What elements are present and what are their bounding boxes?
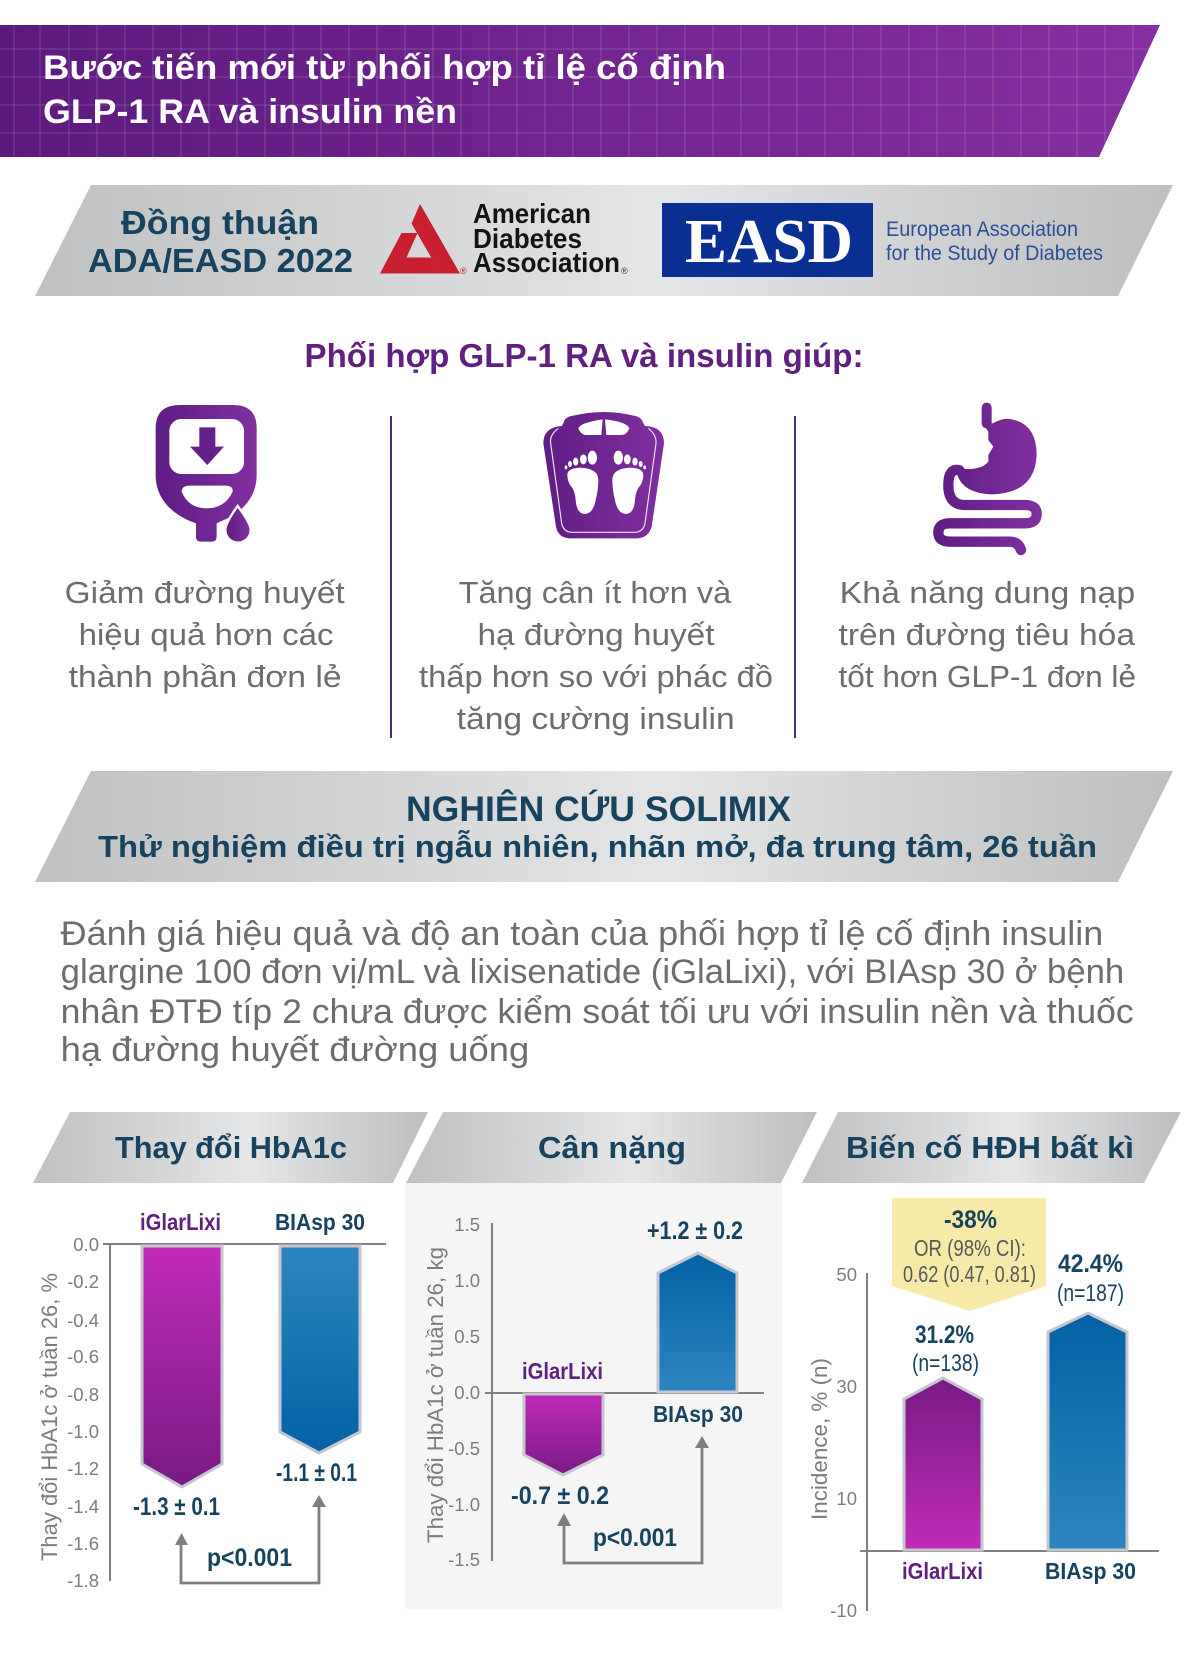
panel: weight background bbox=[405, 1183, 782, 1609]
text block: study objective: Đánh giá hiệu quả và độ an toàn của phối hợp tỉ lệ cố định insulin bbox=[61, 915, 1103, 953]
title: GLP-1 RA và insulin nền bbox=[43, 93, 457, 131]
panel: weight chart bbox=[406, 1112, 817, 1570]
axes and ticks bbox=[807, 1264, 1159, 1621]
panel: SOLIMIX banner bbox=[35, 771, 1173, 882]
bar: iGlarLixi: -1.3 ± 0.1 bbox=[133, 1493, 220, 1521]
axes and ticks: -1.0 bbox=[448, 1494, 480, 1515]
heading: consensus: ADA/EASD 2022 bbox=[88, 242, 353, 279]
text: benefit 2: thấp hơn so với phác đồ bbox=[419, 659, 773, 694]
heading: combination benefits: Phối hợp GLP-1 RA và insulin giúp: bbox=[304, 337, 864, 374]
axes and ticks: -1.2 bbox=[67, 1458, 99, 1479]
text: benefit 2: hạ đường huyết bbox=[478, 617, 715, 652]
arrow: significance bbox=[557, 1436, 709, 1563]
heading: weight bbox=[406, 1112, 817, 1183]
header banner bbox=[0, 25, 1200, 157]
axes and ticks bbox=[423, 1214, 764, 1570]
title bbox=[43, 49, 726, 131]
bar: BIAsp 30 bbox=[647, 1217, 743, 1427]
text: benefit 1: hiệu quả hơn các bbox=[79, 617, 334, 652]
logo: American Diabetes Association: ® bbox=[460, 266, 467, 276]
axes and ticks: -0.6 bbox=[67, 1346, 99, 1367]
callout: odds ratio: -38% bbox=[944, 1206, 997, 1234]
panel: benefit 2 bbox=[419, 412, 773, 736]
bar: BIAsp 30: +1.2 ± 0.2 bbox=[647, 1217, 743, 1245]
text: benefit 2 bbox=[419, 575, 773, 736]
logo: American Diabetes Association: Diabetes bbox=[473, 223, 582, 254]
bar: BIAsp 30: -1.1 ± 0.1 bbox=[276, 1459, 357, 1487]
heading: HbA1c: Thay đổi HbA1c bbox=[115, 1130, 347, 1165]
axes and ticks: 0.0 bbox=[73, 1234, 99, 1255]
heading: HbA1c bbox=[33, 1112, 428, 1183]
bar: BIAsp 30: BIAsp 30 bbox=[1045, 1558, 1136, 1584]
axes and ticks: -0.4 bbox=[67, 1310, 99, 1331]
axes and ticks: 30 bbox=[836, 1376, 857, 1397]
logo: EASD bbox=[662, 203, 1103, 277]
axes and ticks: 0.0 bbox=[454, 1382, 480, 1403]
axes and ticks: 1.0 bbox=[454, 1270, 480, 1291]
axes and ticks: 1.5 bbox=[454, 1214, 480, 1235]
logo: EASD: for the Study of Diabetes bbox=[886, 242, 1103, 265]
bar: iGlarLixi: iGlarLixi bbox=[902, 1558, 983, 1584]
bar: BIAsp 30 bbox=[1045, 1250, 1136, 1584]
axes and ticks bbox=[37, 1234, 386, 1591]
icon: weighing scale bbox=[543, 412, 664, 538]
arrow: significance: p<0.001 bbox=[207, 1544, 292, 1572]
axes and ticks: 10 bbox=[836, 1488, 857, 1509]
axes and ticks: -1.0 bbox=[67, 1421, 99, 1442]
icon: stomach and intestine bbox=[938, 408, 1037, 550]
text: benefit 3: tốt hơn GLP-1 đơn lẻ bbox=[838, 659, 1136, 694]
bar: iGlarLixi bbox=[133, 1209, 222, 1521]
callout: odds ratio: 0.62 (0.47, 0.81) bbox=[903, 1261, 1036, 1287]
bar: iGlarLixi: iGlarLixi bbox=[522, 1358, 603, 1384]
heading: consensus: Đồng thuận bbox=[121, 204, 319, 241]
arrow: significance bbox=[175, 1495, 326, 1583]
bar: iGlarLixi: -0.7 ± 0.2 bbox=[511, 1482, 609, 1510]
bar: BIAsp 30: (n=187) bbox=[1057, 1280, 1124, 1307]
logo: American Diabetes Association: ® bbox=[621, 266, 628, 276]
bar: iGlarLixi bbox=[902, 1321, 983, 1584]
bar: iGlarLixi: (n=138) bbox=[912, 1350, 979, 1377]
heading: SOLIMIX: NGHIÊN CỨU SOLIMIX bbox=[406, 789, 792, 829]
axes and ticks: -0.8 bbox=[67, 1384, 99, 1405]
icon: glucose meter bbox=[156, 405, 257, 543]
text: benefit 2: Tăng cân ít hơn và bbox=[459, 575, 732, 610]
bar: iGlarLixi: 31.2% bbox=[915, 1321, 974, 1349]
axes and ticks: -1.8 bbox=[67, 1570, 99, 1591]
text block: study objective bbox=[61, 915, 1134, 1069]
logo: EASD: European Association bbox=[886, 218, 1078, 241]
text: benefit 2: tăng cường insulin bbox=[457, 701, 735, 736]
bar: iGlarLixi: iGlarLixi bbox=[140, 1209, 221, 1235]
callout: odds ratio bbox=[892, 1198, 1046, 1311]
axes and ticks: -10 bbox=[830, 1600, 857, 1621]
text: benefit 1 bbox=[65, 575, 345, 694]
bar: iGlarLixi bbox=[511, 1358, 609, 1510]
text block: study objective: nhân ĐTĐ típ 2 chưa được kiểm soát tối ưu với insulin nền và thuốc bbox=[61, 993, 1134, 1031]
bar: BIAsp 30: BIAsp 30 bbox=[275, 1209, 365, 1235]
bar: BIAsp 30: BIAsp 30 bbox=[653, 1401, 743, 1427]
text: benefit 3: trên đường tiêu hóa bbox=[838, 617, 1136, 652]
axes and ticks: -0.2 bbox=[67, 1271, 99, 1292]
heading: hypoglycaemia bbox=[802, 1112, 1181, 1183]
axes and ticks: 50 bbox=[836, 1264, 857, 1285]
logo: EASD: EASD bbox=[685, 208, 853, 276]
axes and ticks: Thay đổi HbA1c ở tuần 26, % bbox=[37, 1273, 62, 1561]
axes and ticks: -1.5 bbox=[448, 1549, 480, 1570]
panel: benefit 3 bbox=[838, 408, 1136, 694]
text: benefit 3 bbox=[838, 575, 1136, 694]
axes and ticks: -1.6 bbox=[67, 1533, 99, 1554]
text block: study objective: hạ đường huyết đường uống bbox=[61, 1031, 529, 1069]
panel: benefit 1 bbox=[65, 405, 345, 694]
axes and ticks: Thay đổi HbA1c ở tuần 26, kg bbox=[423, 1247, 448, 1543]
heading: hypoglycaemia: Biến cố HĐH bất kì bbox=[846, 1130, 1134, 1165]
title: Bước tiến mới từ phối hợp tỉ lệ cố định bbox=[43, 49, 726, 87]
axes and ticks: -1.4 bbox=[67, 1496, 99, 1517]
arrow: significance: p<0.001 bbox=[593, 1524, 677, 1552]
panel: HbA1c chart bbox=[33, 1112, 428, 1591]
heading: weight: Cân nặng bbox=[538, 1130, 686, 1165]
logo: American Diabetes Association: Association bbox=[473, 247, 620, 278]
panel: hypoglycaemia chart bbox=[802, 1112, 1181, 1621]
panel: consensus banner bbox=[35, 185, 1173, 296]
axes and ticks: Incidence, % (n) bbox=[807, 1358, 832, 1520]
text: benefit 3: Khả năng dung nạp bbox=[840, 575, 1135, 610]
heading: consensus bbox=[88, 204, 353, 279]
text: benefit 1: Giảm đường huyết bbox=[65, 575, 345, 610]
logo: American Diabetes Association: American bbox=[473, 198, 591, 229]
logo: American Diabetes Association bbox=[380, 198, 628, 278]
bar: BIAsp 30: 42.4% bbox=[1058, 1250, 1123, 1278]
axes and ticks: -0.5 bbox=[448, 1438, 480, 1459]
text: benefit 1: thành phần đơn lẻ bbox=[69, 659, 342, 694]
text block: study objective: glargine 100 đơn vị/mL và lixisenatide (iGlaLixi), với BIAsp 30 ở bệnh bbox=[61, 953, 1124, 991]
bar: BIAsp 30 bbox=[275, 1209, 365, 1487]
callout: odds ratio: OR (98% CI): bbox=[914, 1235, 1026, 1261]
axes and ticks: 0.5 bbox=[454, 1326, 480, 1347]
subheading: trial design: Thử nghiệm điều trị ngẫu nhiên, nhãn mở, đa trung tâm, 26 tuần bbox=[98, 829, 1097, 864]
